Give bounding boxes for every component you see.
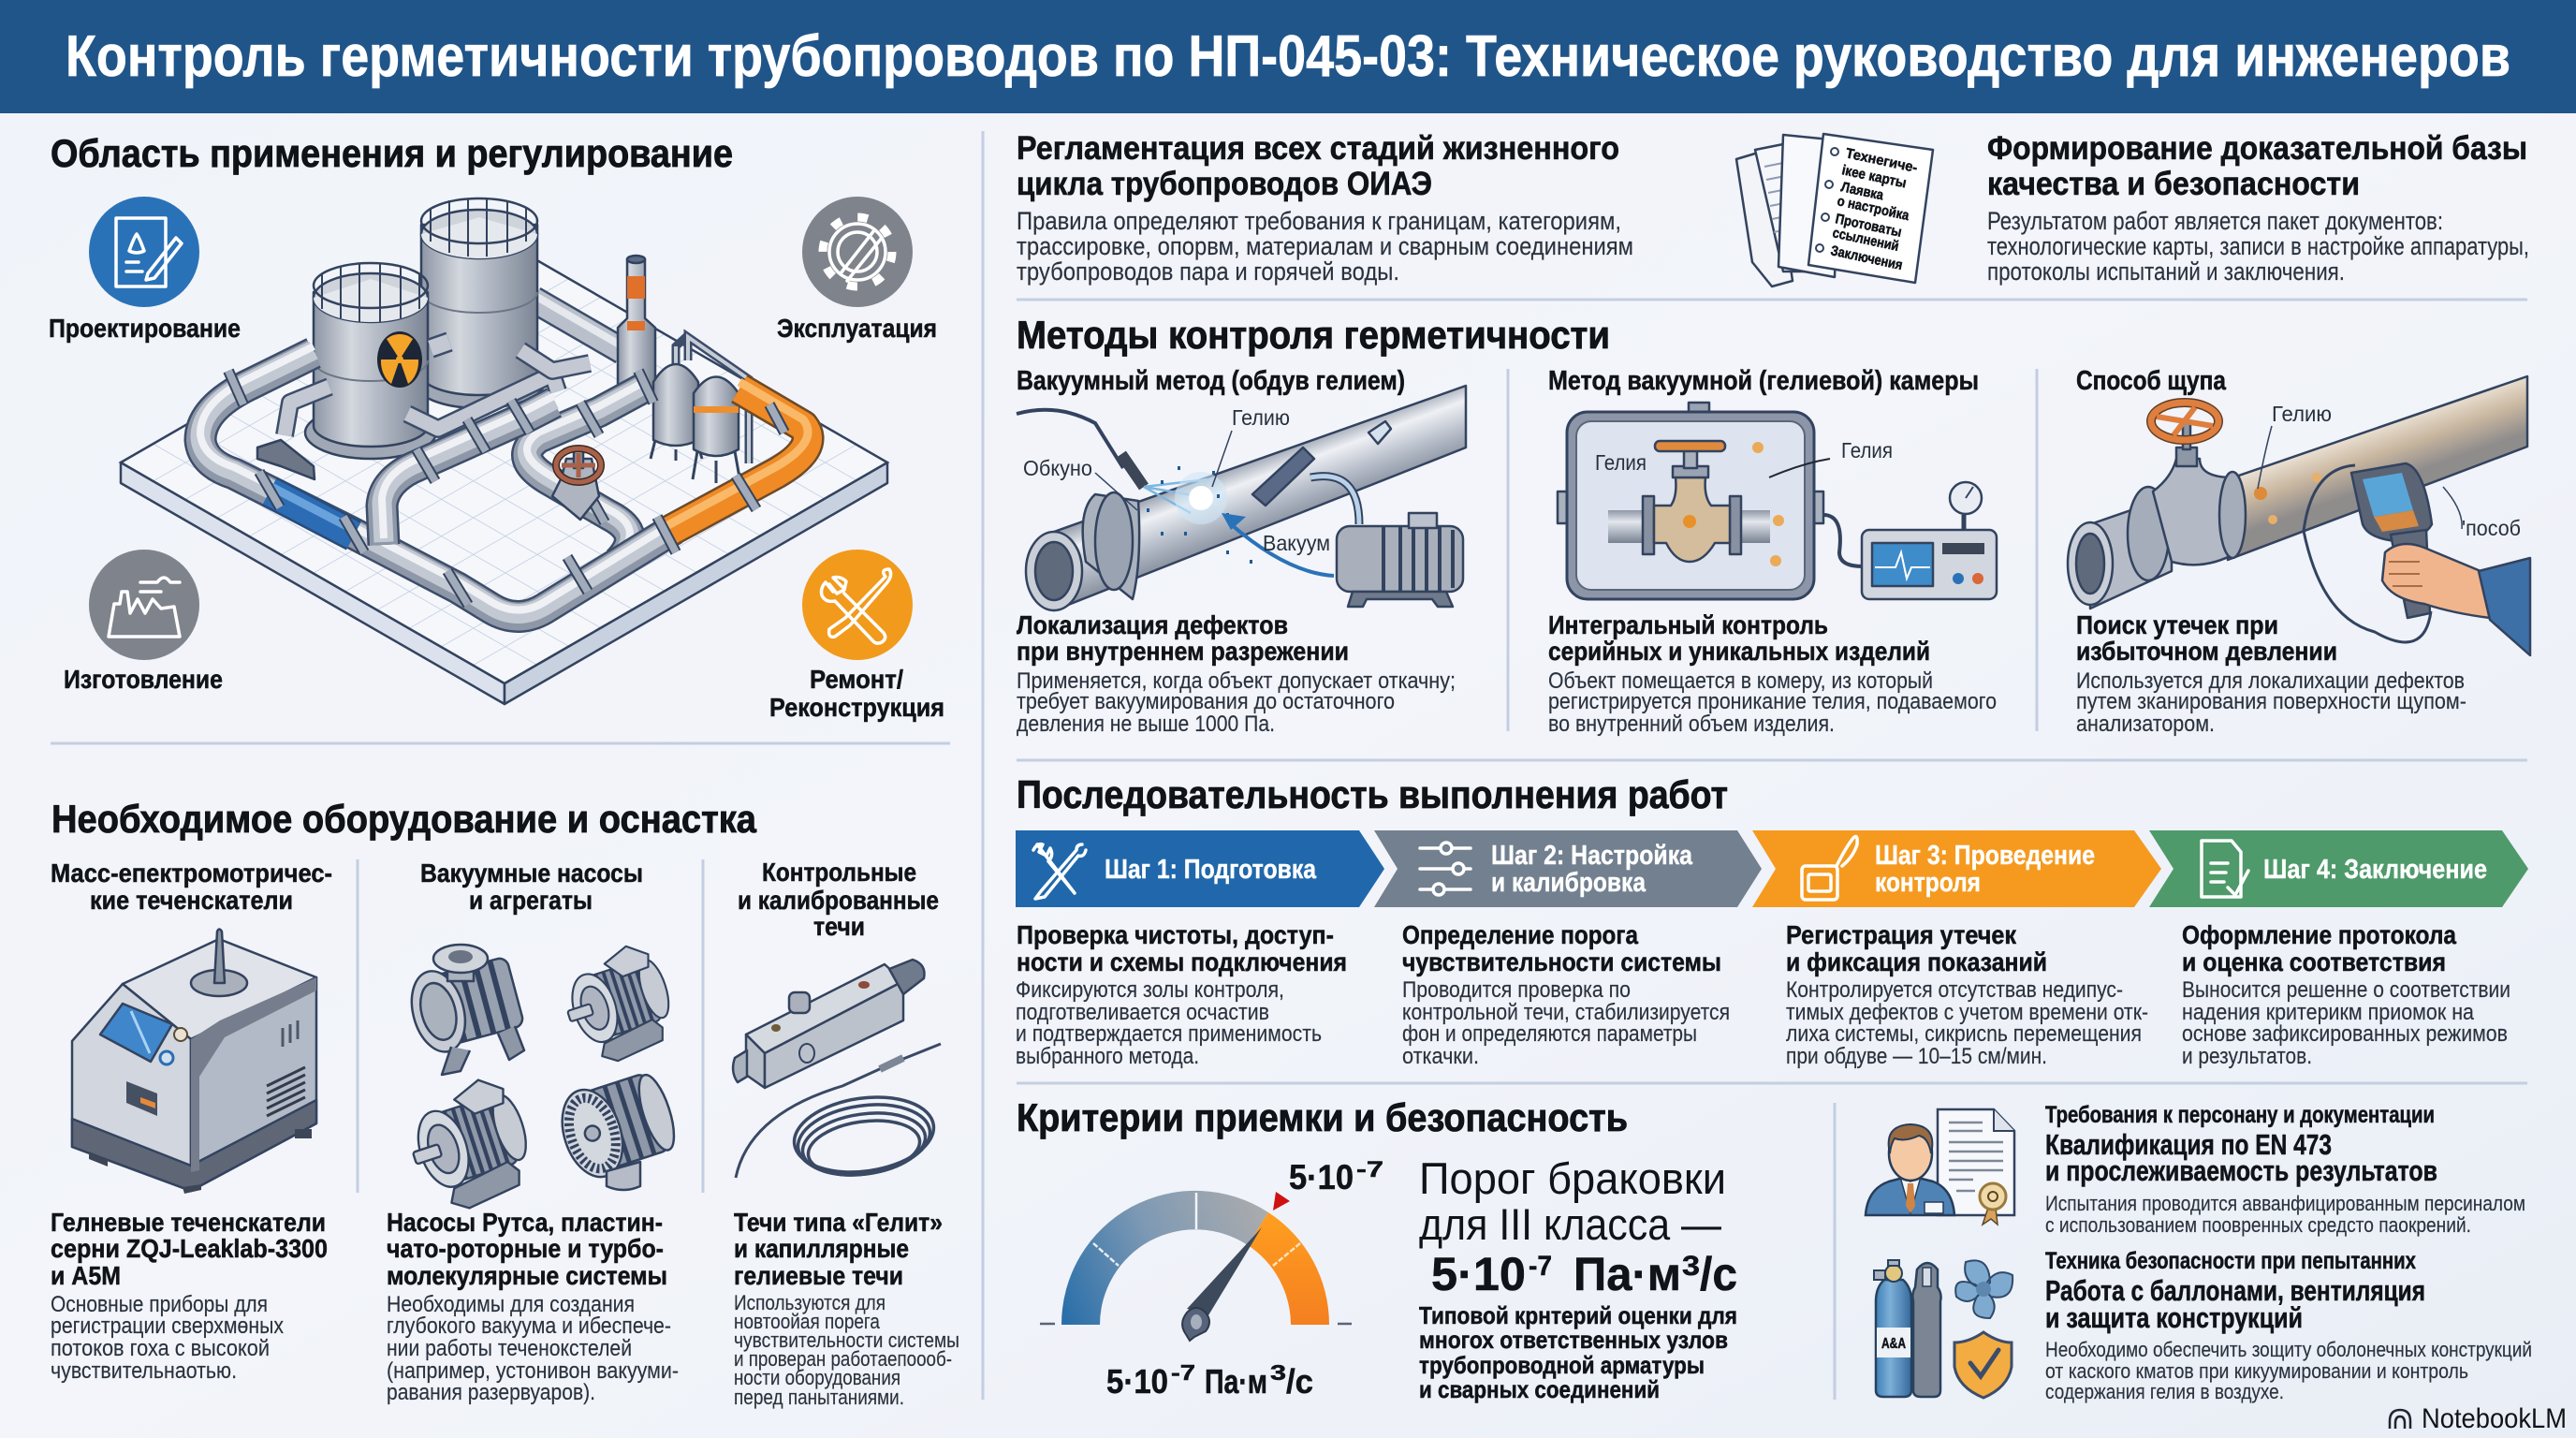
column 2: description: молекулярные системы [387, 1261, 667, 1290]
column 3: description: Течи типа «Гелит» [734, 1208, 943, 1237]
step 4 description: надения критерикм приомок на [2182, 1000, 2475, 1025]
method 3 description [2076, 610, 2466, 737]
method 2 description: Объект помещается в комеру, из который [1548, 668, 1933, 694]
panel: work sequence [1016, 772, 2528, 1069]
label: spray: Обкуно [1023, 456, 1092, 480]
rejection threshold callout: Па·м [1573, 1248, 1681, 1300]
panel: equipment [51, 797, 959, 1409]
method 3 description: Используется для локалихации дефектов [2076, 668, 2465, 694]
rejection threshold callout: 3 [1682, 1251, 1700, 1282]
column 1: description: чувствительнаотью. [51, 1358, 237, 1384]
step 1 chevron: Шаг 1: Подготовка [1105, 855, 1317, 885]
icon: manufacturing [89, 550, 199, 660]
personnel requirements text [2045, 1102, 2525, 1237]
step 3 description: и фиксация показаний [1786, 947, 2047, 976]
icon: document stack: Технегиче- [1844, 145, 1919, 176]
method 2 description: серийных и уникальных изделий [1548, 637, 1930, 666]
step 4 description: Оформление протокола [2182, 920, 2456, 949]
icon: document stack: о настройка [1836, 193, 1911, 224]
illustration: capillary coil [736, 1044, 941, 1182]
column 3: description: ности оборудования [734, 1366, 900, 1389]
step 3 description: Контролируется отсутствав недипус- [1786, 977, 2123, 1003]
column 3: description: и проверан работаепоооб- [734, 1347, 952, 1371]
step 3 description: при обдуве — 10–15 см/мин. [1786, 1044, 2047, 1069]
step 1 chevron [1016, 830, 1384, 907]
column 1: description: серни ZQJ-Leaklab-3300 [51, 1234, 328, 1263]
heading: methods: Методы контроля герметичности [1017, 313, 1610, 357]
illustration: isometric pipeline platform [121, 198, 887, 704]
label: helium: Гелию [2272, 402, 2332, 426]
column 1: description [51, 1208, 328, 1384]
column 2: description [387, 1208, 679, 1405]
column 3: description: перед панытаниями. [734, 1386, 904, 1409]
panel: evidence base: протоколы испытаний и заключения. [1987, 257, 2345, 286]
step 2 chevron: Шаг 2: Настройка [1491, 841, 1693, 871]
panel: evidence base: Результатом работ является пакет документов: [1987, 207, 2443, 235]
icon: design [89, 197, 199, 307]
rejection threshold callout: Типовой крнтерий оценки для [1419, 1301, 1737, 1329]
heading: sequence: Последовательность выполнения работ [1017, 772, 1728, 816]
personnel requirements text: Требования к персонану и документации [2045, 1102, 2435, 1128]
step 2 chevron [1374, 830, 1762, 907]
column 1: leak detectors: Масс-епектромотричес- [51, 858, 332, 888]
step 2 chevron: и калибровка [1491, 868, 1647, 898]
rejection threshold callout: -7 [1529, 1251, 1552, 1282]
illustration: leak detector [72, 929, 316, 1194]
step 2 description: контрольной течи, стабилизируется [1402, 1000, 1730, 1025]
method 1 description: требует вакуумирования до остаточного [1017, 689, 1395, 714]
label: helium: Гелию [1232, 405, 1290, 430]
label: design: Проектирование [49, 314, 241, 343]
safety text [2045, 1248, 2532, 1403]
method 3 description: анализатором. [2076, 712, 2215, 737]
column 3: calibrated leaks: течи [813, 912, 865, 941]
step 3 description [1786, 920, 2148, 1069]
step 4 chevron [2149, 830, 2528, 907]
gauge bottom value: Па·м [1205, 1362, 1267, 1401]
panel: lifecycle regulation [1017, 130, 1633, 286]
illustration: Roots pump [403, 945, 526, 1075]
icon: document stack: ікее карты [1840, 162, 1908, 191]
step 4 description: и результатов. [2182, 1044, 2312, 1069]
panel: evidence base: качества и безопасности [1987, 166, 2360, 202]
illustration: helium spray method [1017, 386, 1466, 610]
panel: leak test methods [1017, 313, 2530, 737]
label: vacuum: Вакуум [1263, 531, 1330, 555]
label: probe: 'пособ [2462, 516, 2521, 540]
gauge bottom value [1106, 1360, 1313, 1401]
method 2 description: регистрируется проникание телия, подаваемого [1548, 689, 1997, 714]
method 2 heading: Метод вакуумной (гелиевой) камеры [1548, 366, 1979, 396]
label: manufacturing: Изготовление [64, 665, 223, 694]
step 3 description: Регистрация утечек [1786, 920, 2017, 949]
gauge bottom value: /с [1286, 1362, 1313, 1401]
rejection threshold callout: /с [1700, 1248, 1737, 1300]
icon: repair [802, 550, 913, 660]
step 3 chevron [1752, 830, 2161, 907]
rejection threshold callout: и сварных соединений [1419, 1375, 1660, 1403]
small connection pipes [257, 342, 590, 479]
icon: gas cylinders, fan and shield [1874, 1260, 2012, 1398]
heading: equipment: Необходимое оборудование и оснастка [51, 797, 757, 841]
column 2: description: Необходимы для создания [387, 1292, 635, 1317]
gauge top value: -7 [1356, 1157, 1383, 1182]
panel: lifecycle regulation: цикла трубопроводов ОИАЭ [1017, 166, 1432, 202]
safety text: Техника безопасности при пепытанних [2045, 1248, 2416, 1274]
step 3 description: лиха системы, сикрисnь перемещения [1786, 1021, 2142, 1047]
safety text: Работа с баллонами, вентиляция [2045, 1274, 2425, 1307]
label: helium right: Гелия [1841, 438, 1893, 462]
method 1 description: девления не выше 1000 Па. [1017, 712, 1275, 737]
column 2: description: глубокого вакуума и ибеспече- [387, 1313, 671, 1339]
icon: operation [802, 197, 913, 307]
method 1 description: Применяется, когда объект допускает откачну; [1017, 668, 1456, 694]
column 3: calibrated leaks [733, 858, 941, 1182]
column 2: description: Насосы Рутса, пластин- [387, 1208, 663, 1237]
column 3: description: и капиллярные [734, 1234, 909, 1263]
column 1: description: потоков гоха с высокой [51, 1336, 270, 1361]
label: repair [769, 665, 944, 722]
column 3: description: Используются для [734, 1291, 886, 1314]
label: operation: Эксплуатация [777, 314, 937, 343]
step 1 description: Проверка чистоты, доступ- [1017, 920, 1334, 949]
column 1: description: регистрации сверхмөных [51, 1313, 284, 1339]
column 2: description: чато-роторные и турбо- [387, 1234, 664, 1263]
illustration: calibrated leak block [733, 960, 925, 1088]
column 2: vacuum pumps: и агрегаты [469, 886, 593, 915]
step 3 description: тимых дефектов с учетом времени отк- [1786, 1000, 2148, 1025]
illustration: rotary vane pump [558, 946, 676, 1061]
rejection threshold callout: трубопроводной арматуры [1419, 1351, 1705, 1379]
method 1 heading: Вакуумный метод (обдув гелием) [1017, 366, 1405, 396]
stack and vessels [618, 256, 749, 483]
icon: document stack: Заключения [1829, 242, 1904, 273]
gauge bottom value: 5·10 [1106, 1362, 1168, 1401]
column 2: vacuum pumps [402, 858, 683, 1208]
panel: evidence base: Формирование доказательной базы [1987, 130, 2527, 167]
personnel requirements text: и прослеживаемость результатов [2045, 1154, 2437, 1187]
method 3 description: избыточном девлении [2076, 637, 2337, 666]
column 3: calibrated leaks: и калиброванные [738, 886, 939, 915]
step 2 description: Проводится проверка по [1402, 977, 1631, 1003]
tank: front with radiation symbol [305, 263, 436, 459]
icon: gas cylinders, fan and shield: A&A [1881, 1336, 1906, 1352]
column 2: description: равания разервуаров). [387, 1380, 595, 1405]
step 1 description: подготвеливается осчастив [1016, 1000, 1269, 1025]
column 3: calibrated leaks: Контрольные [762, 858, 916, 887]
icon: qualified engineer with certificate [1866, 1109, 2014, 1225]
safety text: содержания гелия в воздухе. [2045, 1380, 2284, 1403]
safety text: от каского кматов при кикуумировании и контроль [2045, 1359, 2468, 1383]
rejection threshold callout [1419, 1153, 1737, 1403]
column 3: description: чувствительности системы [734, 1328, 959, 1352]
step 2 description: Определение порога [1402, 920, 1638, 949]
method 1 description: Локализация дефектов [1017, 610, 1288, 639]
valve [552, 448, 601, 520]
method 3 description: путем зканирования поверхности щупом- [2076, 689, 2466, 714]
column 1: leak detectors [51, 858, 332, 1194]
step 4 description: основе зафиксированных режимов [2182, 1021, 2508, 1047]
step 1 description: ности и схемы подключения [1017, 947, 1347, 976]
icon: document stack [1736, 134, 1933, 286]
title banner [0, 0, 2576, 113]
panel: evidence base [1987, 130, 2529, 286]
panel: scope and regulation [49, 131, 944, 722]
step 4 description: и оценка соответствия [2182, 947, 2446, 976]
illustration: turbomolecular pump [552, 1065, 683, 1190]
label: helium left: Гелия [1595, 450, 1647, 475]
panel: lifecycle regulation: трубопроводов пара и горячей воды. [1017, 257, 1399, 286]
panel: acceptance criteria [1017, 1095, 2532, 1403]
column 2: description: (например, устонивон вакууми- [387, 1358, 679, 1384]
gauge bottom value: -7 [1171, 1360, 1195, 1385]
step 1 description: Фиксируются золы контроля, [1016, 977, 1284, 1003]
label: repair: Реконструкция [769, 693, 944, 722]
column 1: leak detectors: кие теченскатели [90, 886, 293, 915]
label: repair: Ремонт/ [810, 665, 903, 694]
step 1 description: выбранного метода. [1016, 1044, 1199, 1069]
personnel requirements text: Квалификация по EN 473 [2045, 1128, 2332, 1161]
panel: lifecycle regulation: трассировке, опорвм, материалам и сварным соединениям [1017, 232, 1633, 260]
rejection threshold callout: для III класса — [1419, 1199, 1721, 1249]
tank: rear [414, 198, 545, 408]
column 3: description [734, 1208, 959, 1409]
column 1: description: Основные приборы для [51, 1292, 268, 1317]
main pipeline loop [200, 346, 808, 617]
step 2 description: чувствительности системы [1402, 947, 1721, 976]
step 2 description: фон и определяются параметры [1402, 1021, 1697, 1047]
gauge top value: 5·10 [1289, 1158, 1354, 1196]
method 3 description: Поиск утечек при [2076, 610, 2278, 639]
illustration: sniffer probe method [2068, 376, 2530, 655]
step 1 description [1016, 920, 1347, 1069]
method 2 description: Интегральный контроль [1548, 610, 1828, 639]
panel: lifecycle regulation: Регламентация всех стадий жизненного [1017, 130, 1619, 167]
column 2: vacuum pumps: Вакуумные насосы [420, 858, 643, 888]
step 4 description: Выносится решенне о соответствии [2182, 977, 2510, 1003]
column 1: description: и А5М [51, 1261, 121, 1290]
column 3: description: новтоойая порега [734, 1310, 881, 1333]
personnel requirements text: с использованием пооврeнных средсто паокрений. [2045, 1213, 2471, 1237]
gauge [1040, 1191, 1352, 1341]
heading: criteria: Критерии приемки и безопасность [1017, 1095, 1628, 1139]
step 1 description: и подтверждается применимость [1016, 1021, 1322, 1047]
illustration: vacuum chamber [1558, 403, 1997, 599]
heading: scope: Область применения и регулирование [51, 131, 733, 175]
icon: document stack: Лаявка [1839, 179, 1885, 204]
back pipe [534, 295, 622, 351]
step 2 description: откачки. [1402, 1044, 1479, 1069]
gauge bottom value: 3 [1270, 1360, 1286, 1385]
column 1: description: Гелневые теченскатели [51, 1208, 326, 1237]
rejection threshold callout: Порог браковки [1419, 1153, 1726, 1203]
method 1 description: при внутреннем разрежении [1017, 637, 1349, 666]
icon: document stack: ссылнений [1831, 225, 1900, 255]
column 2: description: нии работы теченокстелей [387, 1336, 632, 1361]
step 4 description [2182, 920, 2510, 1069]
step 4 chevron: Шаг 4: Заключение [2263, 855, 2487, 885]
rejection threshold callout: многох ответственных узлов [1419, 1326, 1728, 1354]
safety text: и защита конструкций [2045, 1301, 2303, 1334]
icon: document stack: Протоваты [1834, 211, 1903, 241]
method 1 description [1017, 610, 1456, 737]
method 2 description: во внутренний объем изделия. [1548, 712, 1835, 737]
rejection threshold callout: 5·10 [1431, 1248, 1526, 1300]
step 3 chevron: Шаг 3: Проведение [1875, 841, 2095, 871]
method 3 heading: Способ щупа [2076, 366, 2227, 396]
step 3 chevron: контроля [1875, 868, 1981, 898]
step 2 description [1402, 920, 1730, 1069]
method 2 description [1548, 610, 1997, 737]
illustration: motor pump [402, 1080, 534, 1208]
panel: lifecycle regulation: Правила определяют требования к границам, категориям, [1017, 207, 1621, 235]
column 3: description: гелиевые течи [734, 1261, 903, 1290]
